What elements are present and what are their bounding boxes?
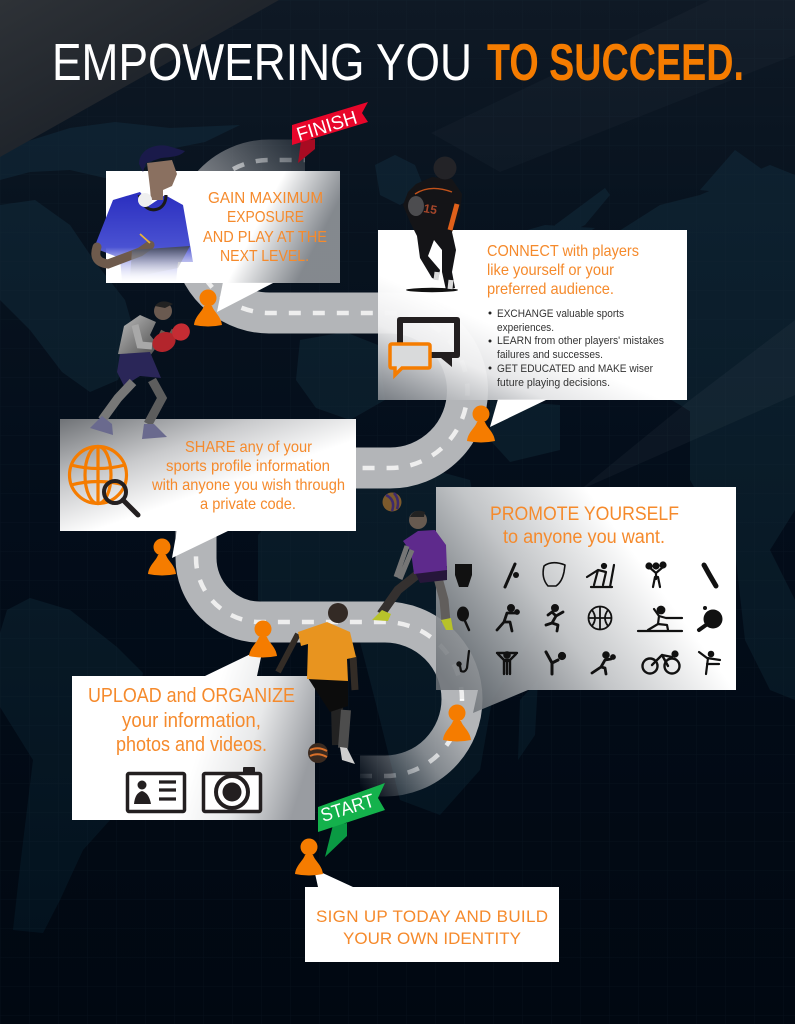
bullet list bbox=[488, 308, 664, 389]
title: EMPOWERING YOU bbox=[52, 34, 472, 92]
icon: volleyball ball bbox=[382, 492, 402, 512]
panel: upload: your information, bbox=[122, 710, 261, 732]
icon: person pin sign up bbox=[295, 838, 323, 876]
panel: gain maximum exposure: NEXT LEVEL. bbox=[220, 248, 309, 265]
icon: table tennis bbox=[699, 606, 722, 630]
icon: volleyball player bbox=[497, 605, 518, 631]
icon: bowler bbox=[592, 653, 614, 674]
athlete: coach bbox=[94, 145, 193, 282]
panel: share bbox=[60, 419, 356, 558]
road section: start fade bbox=[360, 699, 462, 776]
athlete: volleyball player bbox=[372, 511, 453, 630]
icon: martial artist bbox=[546, 652, 565, 674]
bullet list: GET EDUCATED and MAKE wiser bbox=[497, 363, 653, 375]
panel: share: with anyone you wish through bbox=[151, 477, 345, 494]
flag: start: START bbox=[318, 791, 377, 827]
panel: connect bbox=[378, 230, 687, 427]
athlete: football player bbox=[403, 156, 462, 292]
icon: chat bubbles bbox=[390, 317, 460, 375]
road section: middle bbox=[194, 250, 468, 699]
icon: cheerleader bbox=[646, 562, 666, 587]
icon: shuttlecock bbox=[455, 564, 472, 587]
icon: hockey stick bbox=[457, 651, 469, 672]
sports icons grid bbox=[455, 562, 722, 674]
athlete: soccer player bbox=[278, 603, 356, 764]
top right diagonal band bbox=[431, 0, 795, 172]
top left diagonal band bbox=[0, 0, 279, 157]
panel: connect: CONNECT with players bbox=[487, 243, 639, 260]
icon: person pin share bbox=[148, 538, 176, 576]
panel: gain maximum exposure: EXPOSURE bbox=[227, 209, 304, 226]
icon: basketball bbox=[588, 606, 612, 630]
panel: connect: like yourself or your bbox=[487, 262, 615, 279]
icon: id card bbox=[128, 774, 184, 812]
icon: person pin gain bbox=[194, 290, 222, 326]
icon: ballet dancer bbox=[699, 652, 720, 674]
icon: fencer bbox=[638, 607, 682, 631]
panel: upload: photos and videos. bbox=[116, 734, 267, 756]
panel: promote yourself bbox=[436, 487, 736, 713]
road section: finish fade bbox=[193, 160, 305, 250]
panel: promote yourself: to anyone you want. bbox=[503, 527, 665, 548]
icon: skier bbox=[587, 564, 614, 587]
athlete: boxer bbox=[90, 301, 193, 439]
world map silhouette bbox=[0, 122, 795, 933]
flag: finish: FINISH bbox=[294, 108, 360, 146]
panel: share: sports profile information bbox=[166, 458, 330, 475]
icon: boxing glove bbox=[543, 563, 565, 586]
icon: bat and ball bbox=[505, 564, 519, 587]
panel: gain maximum exposure: AND PLAY AT THE bbox=[203, 229, 327, 246]
panel: sign up: SIGN UP TODAY AND BUILD bbox=[316, 907, 548, 926]
panel: upload: UPLOAD and ORGANIZE bbox=[88, 685, 295, 707]
bullet list: future playing decisions. bbox=[497, 377, 610, 389]
winding road bbox=[193, 160, 468, 776]
panel: sign up bbox=[305, 869, 559, 962]
icon: racket bbox=[457, 606, 469, 630]
road centre dashes: finish bbox=[193, 160, 305, 250]
icon: club bbox=[704, 565, 716, 586]
icon: cyclist bbox=[642, 652, 680, 674]
icon: globe and magnifier bbox=[70, 446, 138, 515]
panel: upload bbox=[72, 648, 315, 820]
icon: person pin upload bbox=[249, 620, 277, 658]
panel: share: SHARE any of your bbox=[185, 439, 313, 456]
bullet list: EXCHANGE valuable sports bbox=[497, 308, 624, 320]
panel: sign up: YOUR OWN IDENTITY bbox=[343, 929, 521, 948]
road centre dashes bbox=[360, 699, 462, 776]
panel: connect: preferred audience. bbox=[487, 281, 614, 298]
panel: share: a private code. bbox=[200, 496, 296, 513]
icon: weightlifter bbox=[497, 653, 517, 674]
icon: person pin promote bbox=[443, 704, 471, 742]
athlete: football player: 15 bbox=[422, 201, 438, 217]
bullet list: LEARN from other players' mistakes bbox=[497, 335, 664, 347]
icon: camera bbox=[204, 767, 260, 812]
bullet list: failures and successes. bbox=[497, 349, 603, 361]
flag: start bbox=[318, 783, 385, 857]
panel: promote yourself: PROMOTE YOURSELF bbox=[490, 504, 679, 525]
right diagonal band bbox=[580, 320, 795, 490]
panel: gain maximum exposure bbox=[106, 171, 340, 312]
icon: person pin connect bbox=[467, 406, 495, 442]
flag: finish bbox=[292, 102, 368, 163]
road centre dashes: main bbox=[194, 250, 468, 699]
bullet list: experiences. bbox=[497, 322, 554, 334]
icon: runner bbox=[546, 605, 563, 631]
panel: gain maximum exposure: GAIN MAXIMUM bbox=[208, 190, 323, 207]
